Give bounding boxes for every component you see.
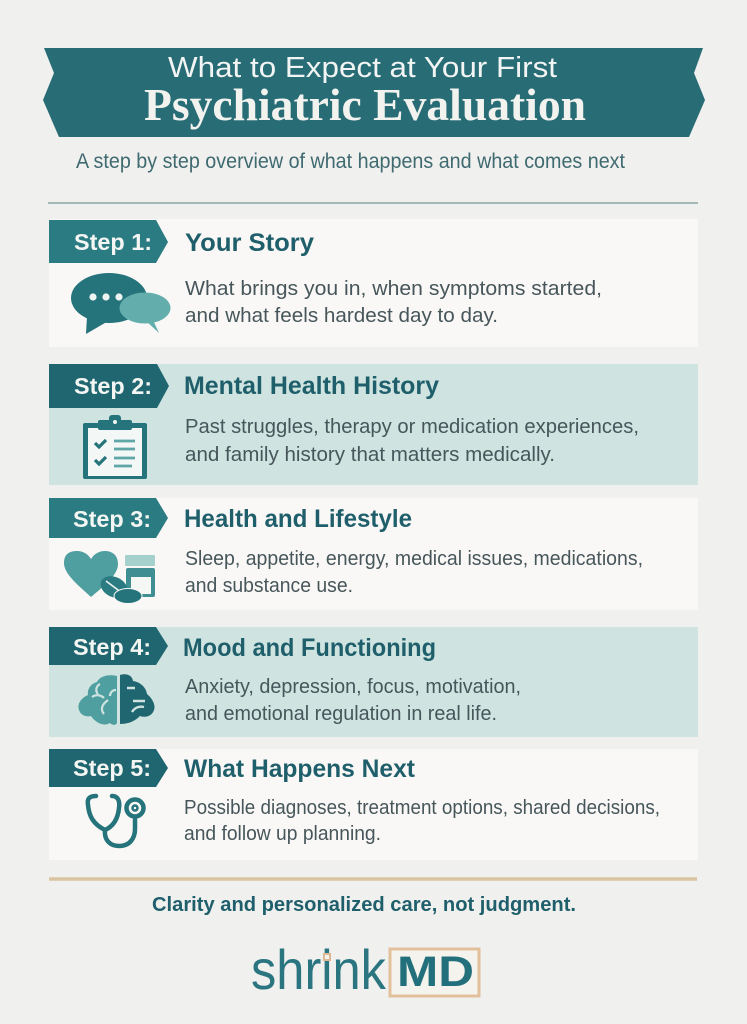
icon: speech bubbles — [71, 273, 170, 334]
step 1 tag — [49, 220, 168, 263]
logo — [251, 938, 479, 1001]
step 4 text: and emotional regulation in real life. — [185, 702, 497, 725]
icon: stethoscope — [88, 796, 144, 846]
step 3 text — [185, 547, 643, 597]
step 2 heading: Mental Health History — [184, 372, 439, 400]
step 1 text — [185, 277, 602, 327]
logo MD box: MD — [397, 948, 474, 996]
icon: clipboard checklist — [83, 415, 147, 479]
step 3 text: Sleep, appetite, energy, medical issues, medications, — [185, 547, 643, 570]
panel: step 2 — [49, 364, 698, 485]
subtitle: A step by step overview of what happens and what comes next — [76, 150, 625, 173]
icon: brain — [78, 674, 155, 725]
step 2 text — [185, 415, 639, 466]
step 3 heading: Health and Lifestyle — [184, 505, 412, 533]
step 1 text: and what feels hardest day to day. — [185, 304, 498, 327]
step 2 text: and family history that matters medically. — [185, 443, 555, 466]
step 1 heading: Your Story — [185, 229, 314, 257]
step 2 tag: Step 2: — [74, 373, 152, 399]
title line one: What to Expect at Your First — [168, 52, 557, 84]
panel: step 3 — [49, 498, 698, 610]
step 5 text: Possible diagnoses, treatment options, shared decisions, — [184, 796, 660, 819]
step 3 tag — [49, 498, 168, 538]
title line two: Psychiatric Evaluation — [144, 80, 586, 130]
step 4 text: Anxiety, depression, focus, motivation, — [185, 675, 521, 698]
step 3 tag: Step 3: — [73, 506, 151, 532]
step 1 text: What brings you in, when symptoms started, — [185, 277, 602, 300]
panel: step 5 — [49, 749, 698, 860]
step 4 heading: Mood and Functioning — [183, 634, 436, 662]
step 5 tag — [49, 749, 168, 787]
step 4 tag: Step 4: — [73, 634, 151, 660]
step 2 text: Past struggles, therapy or medication experiences, — [185, 415, 639, 438]
step 3 text: and substance use. — [185, 574, 353, 597]
icon: heart and medication — [64, 551, 155, 604]
title banner — [43, 48, 705, 137]
logo wordmark: shrink — [251, 938, 387, 1001]
step 1 tag: Step 1: — [74, 229, 152, 255]
panel: step 1 — [49, 219, 698, 347]
step 5 tag: Step 5: — [73, 755, 151, 781]
step 5 text — [184, 796, 660, 845]
step 4 text — [185, 675, 521, 725]
tagline: Clarity and personalized care, not judgment. — [152, 894, 576, 916]
step 2 tag — [49, 364, 169, 408]
panel: step 4 — [49, 627, 698, 737]
step 5 heading: What Happens Next — [184, 755, 416, 783]
step 4 tag — [49, 627, 168, 665]
step 5 text: and follow up planning. — [184, 822, 381, 845]
